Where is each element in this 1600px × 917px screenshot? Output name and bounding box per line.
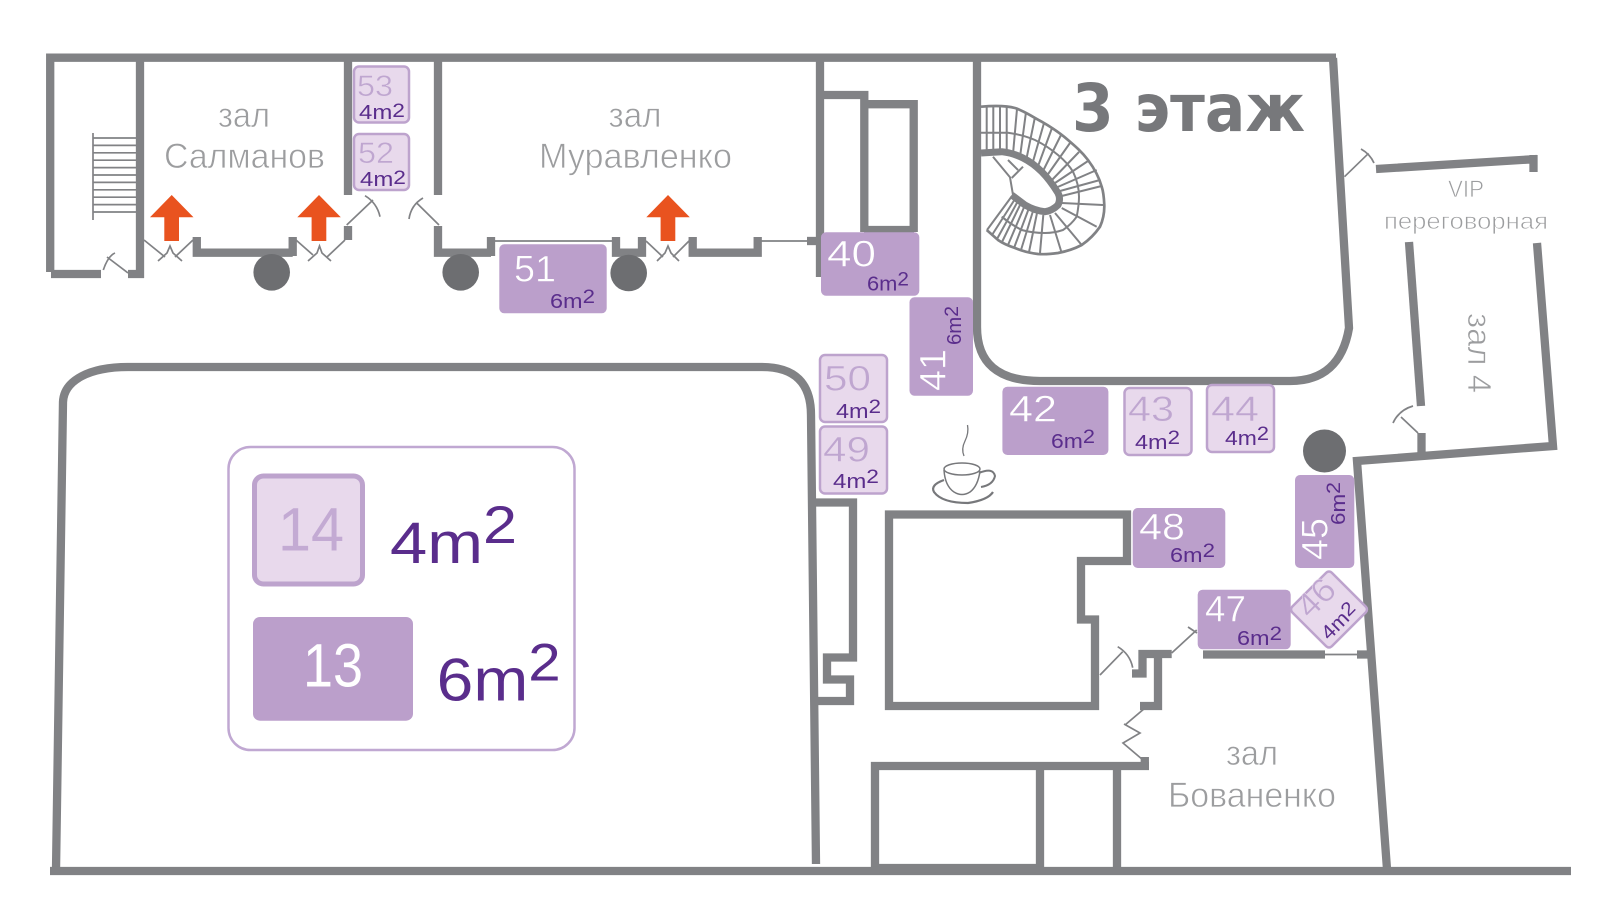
booth 49: 2 xyxy=(866,467,879,488)
booth 47: 2 xyxy=(1270,624,1282,645)
booth 52: 4m xyxy=(360,169,388,191)
booth 43: 2 xyxy=(1168,428,1180,449)
legend: 6 m2 sample booth: 13 xyxy=(303,632,363,700)
booth 45 xyxy=(1294,475,1354,568)
booth 45: 45 xyxy=(1294,518,1336,560)
title: 3 этаж xyxy=(1072,70,1305,147)
booth 47: 47 xyxy=(1205,589,1246,630)
room labels xyxy=(164,96,1548,815)
booth 46: 4m xyxy=(1317,609,1352,645)
straight staircase xyxy=(93,133,136,220)
booth 48: 48 xyxy=(1139,506,1185,547)
booth 42: 42 xyxy=(1009,389,1057,430)
booth 53: 4m xyxy=(359,102,387,124)
legend: 6 m2 sample booth xyxy=(253,617,413,721)
booth 41 xyxy=(910,297,973,396)
booth 51: 51 xyxy=(514,249,556,290)
booth 52: 52 xyxy=(358,137,394,170)
spiral staircase xyxy=(981,106,1104,254)
legend: 4 m2 label: 2 xyxy=(483,496,517,555)
booth 51 xyxy=(499,244,607,313)
legend: 4 m2 label: 4m xyxy=(390,511,471,576)
booth 53: 53 xyxy=(357,70,393,103)
booth 50: 2 xyxy=(869,397,881,418)
booth 53: 2 xyxy=(392,101,405,122)
booth 40 xyxy=(821,232,919,296)
legend: 6 m2 label: 6m xyxy=(437,647,520,714)
booth 45: 2 xyxy=(1324,482,1345,494)
booth 52 xyxy=(354,134,409,191)
booth 46 xyxy=(1289,570,1369,649)
legend panel xyxy=(228,447,574,750)
booth 43: 43 xyxy=(1128,390,1174,429)
booth 48 xyxy=(1133,506,1225,568)
booth 44: 44 xyxy=(1211,390,1259,429)
booth 46: 2 xyxy=(1337,598,1360,621)
room labels: зал xyxy=(608,96,662,135)
doors xyxy=(103,149,1418,760)
booth 51: 2 xyxy=(583,287,595,308)
legend: 4 m2 sample booth: 14 xyxy=(278,496,344,564)
booth 42: 2 xyxy=(1083,427,1095,448)
pillars xyxy=(253,254,1346,472)
booth 43: 4m xyxy=(1135,432,1163,454)
booth 42 xyxy=(1002,387,1108,455)
room labels: переговорная xyxy=(1384,208,1548,234)
booth 41: 2 xyxy=(942,306,963,317)
booth 52: 2 xyxy=(393,168,406,189)
booth 50 xyxy=(820,355,887,423)
icon: coffee cup xyxy=(933,425,995,503)
booth 53 xyxy=(354,66,409,124)
booth 47: 6m xyxy=(1237,628,1265,650)
booth 41: 41 xyxy=(912,349,954,391)
room labels: зал xyxy=(218,96,270,135)
booth 44 xyxy=(1207,385,1274,452)
room labels: Бованенко xyxy=(1168,776,1336,815)
booth 50: 4m xyxy=(836,401,864,423)
booth 48: 6m xyxy=(1170,545,1198,567)
booth 41: 6m xyxy=(944,317,966,345)
booth 47 xyxy=(1198,589,1291,650)
booth 50: 50 xyxy=(824,360,871,399)
booth 44: 2 xyxy=(1257,424,1269,445)
booth 49: 4m xyxy=(833,471,861,493)
room labels: VIP xyxy=(1448,176,1484,203)
room labels: зал 4 xyxy=(1461,313,1498,393)
legend: 4 m2 sample booth xyxy=(254,476,362,584)
booth 51: 6m xyxy=(550,291,578,313)
booth 40: 2 xyxy=(897,270,909,291)
booth 40: 6m xyxy=(867,274,895,296)
booth 42: 6m xyxy=(1051,431,1079,453)
booth 49 xyxy=(820,426,887,494)
legend: 6 m2 label: 2 xyxy=(528,634,561,693)
booth 46: 46 xyxy=(1289,571,1344,626)
room labels: Муравленко xyxy=(539,137,732,176)
booth 43 xyxy=(1124,388,1192,455)
room labels: зал xyxy=(1226,734,1278,773)
booth 44: 4m xyxy=(1225,428,1253,450)
booth 49: 49 xyxy=(823,431,870,470)
booth 45: 6m xyxy=(1328,497,1350,525)
room labels: Салманов xyxy=(164,137,325,176)
booth 48: 2 xyxy=(1203,541,1215,562)
booth 40: 40 xyxy=(827,234,876,275)
entrance arrows xyxy=(150,195,690,241)
